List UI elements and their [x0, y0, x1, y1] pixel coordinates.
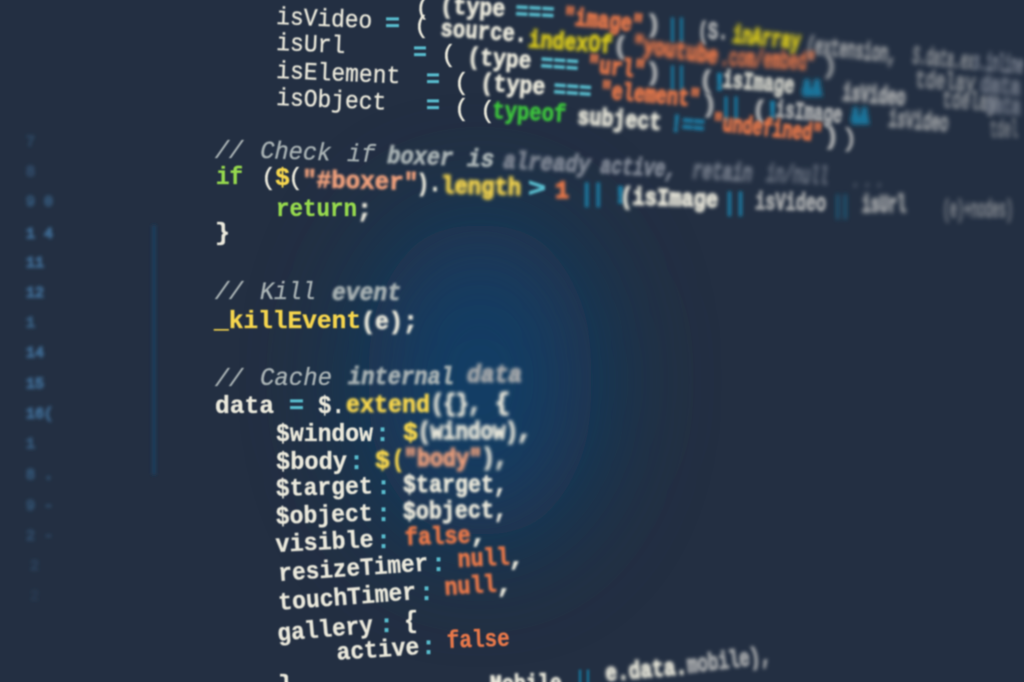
line numbers column: 1 4 — [26, 226, 53, 243]
code line: data extend: extend — [346, 391, 430, 420]
code line: return: return — [276, 195, 357, 224]
comment: check if boxer: Check — [260, 137, 332, 168]
property: active: active — [336, 633, 420, 668]
comment: kill event — [215, 278, 401, 308]
code line: data extend: = — [289, 392, 304, 421]
comment: check if boxer: ... — [850, 166, 886, 195]
code line: isElement: "element" — [599, 77, 701, 115]
comment: cache internal data: data — [467, 361, 522, 390]
code line: isUrl — [276, 29, 1021, 113]
property: active — [336, 625, 510, 668]
property: body — [276, 444, 507, 477]
code line: isVideo: = — [385, 10, 400, 39]
code line: isVideo: ( — [613, 33, 628, 62]
comment: kill event: Kill — [260, 278, 316, 307]
property: visible — [275, 521, 486, 560]
property: window: : — [375, 420, 390, 449]
code line: isElement: || — [721, 94, 741, 123]
property: body: "body" — [404, 445, 482, 474]
property: touchTimer: null — [444, 570, 497, 603]
code line: isUrl: || — [668, 63, 686, 92]
property: active: false — [446, 625, 510, 656]
property: resizeTimer: resizeTimer — [278, 550, 429, 589]
line numbers column: 2 — [30, 588, 39, 605]
property: window: $ — [403, 419, 418, 448]
code line: isObject: = — [426, 92, 440, 121]
comment: cache internal data: // — [215, 365, 244, 394]
comment: check if boxer: // — [215, 137, 244, 166]
code line: isElement: ( — [752, 97, 767, 126]
code line: isUrl: isUrl — [276, 29, 346, 61]
line numbers column: 8 . — [26, 467, 53, 484]
code line: isElement: === — [552, 76, 592, 108]
property: window: (window) — [418, 418, 518, 447]
code line: return: ; — [357, 196, 372, 225]
property: object — [275, 496, 507, 532]
property: target: : — [376, 473, 391, 502]
code line: isUrl: (type — [466, 43, 532, 76]
property: touchTimer: , — [497, 571, 512, 600]
property: resizeTimer: : — [431, 550, 446, 579]
code line: if boxer length: 1 — [555, 177, 569, 206]
line numbers column: 7 — [26, 134, 35, 151]
code line: isObject: !== — [669, 110, 706, 142]
code line: isElement — [276, 57, 1021, 139]
code line: killEvent: (e) — [361, 308, 403, 337]
property: window: $window — [276, 420, 373, 449]
code line: isUrl: === — [539, 50, 579, 82]
code line: isVideo: ( — [414, 12, 429, 41]
code line: bottom partial — [278, 642, 772, 682]
comment: check if boxer: is — [467, 145, 495, 175]
comment: check if boxer: retain — [692, 157, 753, 189]
code line: isVideo: isVideo — [276, 3, 373, 36]
line numbers column: 2 - — [26, 528, 53, 545]
code line: top partial: || — [668, 15, 686, 44]
code line: isUrl: ( — [699, 67, 714, 96]
code line: isUrl: "url" — [586, 51, 647, 86]
property: body: : — [349, 448, 364, 477]
code line: data extend — [215, 389, 510, 421]
code line: top partial: inArray — [731, 21, 802, 57]
code line: isElement: ) — [702, 91, 717, 120]
code line: isObject: isObject — [276, 84, 387, 118]
property: resizeTimer: null — [457, 543, 510, 575]
code line: isObject: ( — [480, 97, 495, 126]
code line: if boxer length: (isImage — [620, 183, 719, 215]
code line: if boxer length: "#boxer" — [302, 166, 419, 198]
closing brace: } — [215, 219, 230, 248]
gutter divider line — [152, 225, 156, 475]
comment: kill event: // — [215, 278, 244, 307]
code line: data extend: data — [215, 392, 274, 421]
code line: isObject: ) — [842, 125, 857, 154]
code line: isUrl: ) — [646, 59, 661, 88]
code line: top partial: (extension, — [805, 32, 898, 70]
code line: killEvent: _killEvent — [213, 307, 361, 336]
code line: if boxer length: ! — [613, 182, 628, 211]
code line: killEvent: ; — [403, 308, 418, 337]
code line: data extend: { — [495, 389, 510, 418]
property: body: $body — [276, 448, 347, 477]
property: gallery: gallery — [276, 612, 374, 649]
comment: check if boxer: in/null — [766, 160, 829, 192]
code line: top partial — [415, 0, 1024, 81]
code line: isUrl: = — [413, 39, 427, 68]
property: touchTimer: touchTimer — [277, 578, 417, 618]
property: target — [275, 471, 507, 504]
code line: isElement: && — [851, 103, 869, 132]
code line: data extend: ({}, — [431, 390, 481, 419]
code line: isElement: = — [426, 66, 440, 95]
line numbers column: 14 — [26, 345, 44, 362]
property: object: $object, — [403, 496, 507, 527]
property: window — [276, 417, 532, 449]
line numbers column: 12 — [26, 285, 44, 302]
code line: if boxer length: || — [724, 189, 746, 218]
comment: check if boxer: boxer — [387, 142, 454, 173]
line numbers column: 2 — [30, 558, 39, 575]
property: visible: false — [404, 522, 471, 553]
code line: isUrl: ( — [441, 41, 456, 70]
blue screen glow — [365, 215, 595, 545]
code line: if boxer length: isUrl — [862, 191, 906, 220]
line numbers column: 1 — [26, 436, 35, 453]
property: window: , — [517, 417, 532, 446]
property: target: $target — [275, 472, 373, 504]
code line: isUrl: tdelay — [914, 66, 976, 99]
code line: data extend: $. — [318, 392, 345, 421]
property: target: $target, — [403, 471, 507, 500]
code line: isObject: ) — [824, 123, 839, 152]
property: touchTimer — [277, 570, 512, 618]
property: object: $object — [275, 500, 373, 532]
code line: if boxer length: || — [581, 180, 604, 209]
code line: isObject: subject — [576, 103, 662, 138]
line numbers column: 15 — [26, 376, 44, 393]
code line: isVideo: ) — [822, 52, 837, 81]
code line: top partial: ) — [646, 11, 661, 40]
code line: isVideo — [276, 3, 837, 81]
line numbers column: 9 0 — [26, 194, 53, 211]
code line: bottom partial: mobile), — [685, 642, 772, 681]
property: resizeTimer: , — [509, 544, 524, 573]
property: visible: : — [376, 527, 391, 556]
property: visible: , — [471, 521, 486, 550]
code line: if boxer length: if — [216, 163, 243, 192]
property: touchTimer: : — [419, 579, 434, 608]
code line: isElement: isImage — [774, 96, 844, 131]
line numbers column — [26, 134, 53, 605]
code line: isElement: isVideo — [887, 105, 950, 139]
code line: isObject: typeof — [492, 97, 567, 130]
property: gallery: { — [404, 607, 418, 636]
property: active: : — [421, 633, 436, 662]
code line: isElement: isElement — [276, 57, 401, 91]
code line: isElement: ( — [454, 69, 469, 98]
code line: isUrl: isImage — [721, 66, 796, 101]
code line: isElement: (type — [479, 69, 546, 103]
code line: if boxer length: isVideo — [755, 188, 827, 219]
code line: if boxer length: ( — [261, 164, 276, 193]
line numbers column: 16( — [26, 406, 53, 423]
property: object: : — [376, 500, 391, 529]
property: visible: visible — [275, 526, 374, 560]
code line: if boxer length: ). — [417, 170, 441, 199]
line numbers column: 9 - — [26, 498, 53, 515]
comment: check if boxer — [215, 137, 886, 195]
property: gallery: : — [379, 611, 394, 640]
property: gallery — [276, 607, 418, 649]
code line: isObject: "undefined" — [711, 109, 824, 149]
property: body: $ — [375, 447, 390, 476]
code line: if boxer length: ( — [288, 164, 303, 193]
code line: top partial: (S. — [698, 18, 728, 47]
comment: check if boxer: if — [347, 140, 377, 170]
code line: if boxer length: $ — [275, 164, 290, 193]
property: body: ( — [392, 446, 404, 475]
comment: kill event: event — [332, 279, 401, 308]
code line: isVideo: indexOf — [527, 26, 613, 61]
code line: if boxer length: || — [834, 192, 849, 221]
comment: cache internal data: Cache — [260, 364, 332, 393]
comment: check if boxer: active, — [600, 152, 677, 185]
comment: check if boxer: already — [503, 147, 592, 181]
code line: if boxer length: length — [441, 172, 522, 203]
comment: cache internal data: internal — [348, 363, 454, 392]
line numbers column: 1 — [26, 315, 35, 332]
code line: isUrl: && — [802, 75, 822, 104]
code line: isUrl: ! — [712, 69, 727, 98]
property: body: ), — [482, 444, 507, 473]
line numbers column: 8 — [26, 164, 35, 181]
line numbers column: 11 — [26, 255, 44, 272]
code line: isVideo: source. — [439, 15, 528, 50]
code line: if boxer length: > — [528, 175, 546, 204]
property: resizeTimer — [278, 543, 524, 589]
code line: if boxer length — [216, 163, 1013, 225]
code line: top partial: "image" — [562, 3, 645, 40]
comment: cache internal data — [215, 361, 522, 394]
code line: isVideo: .com/embed" — [720, 44, 816, 78]
code line: isObject — [276, 84, 1018, 154]
code line: isElement: ! — [765, 97, 780, 126]
code line: isUrl: isVideo — [841, 79, 907, 113]
code line: isVideo: "youtube — [631, 31, 720, 72]
code line: isObject: ( — [454, 95, 469, 124]
